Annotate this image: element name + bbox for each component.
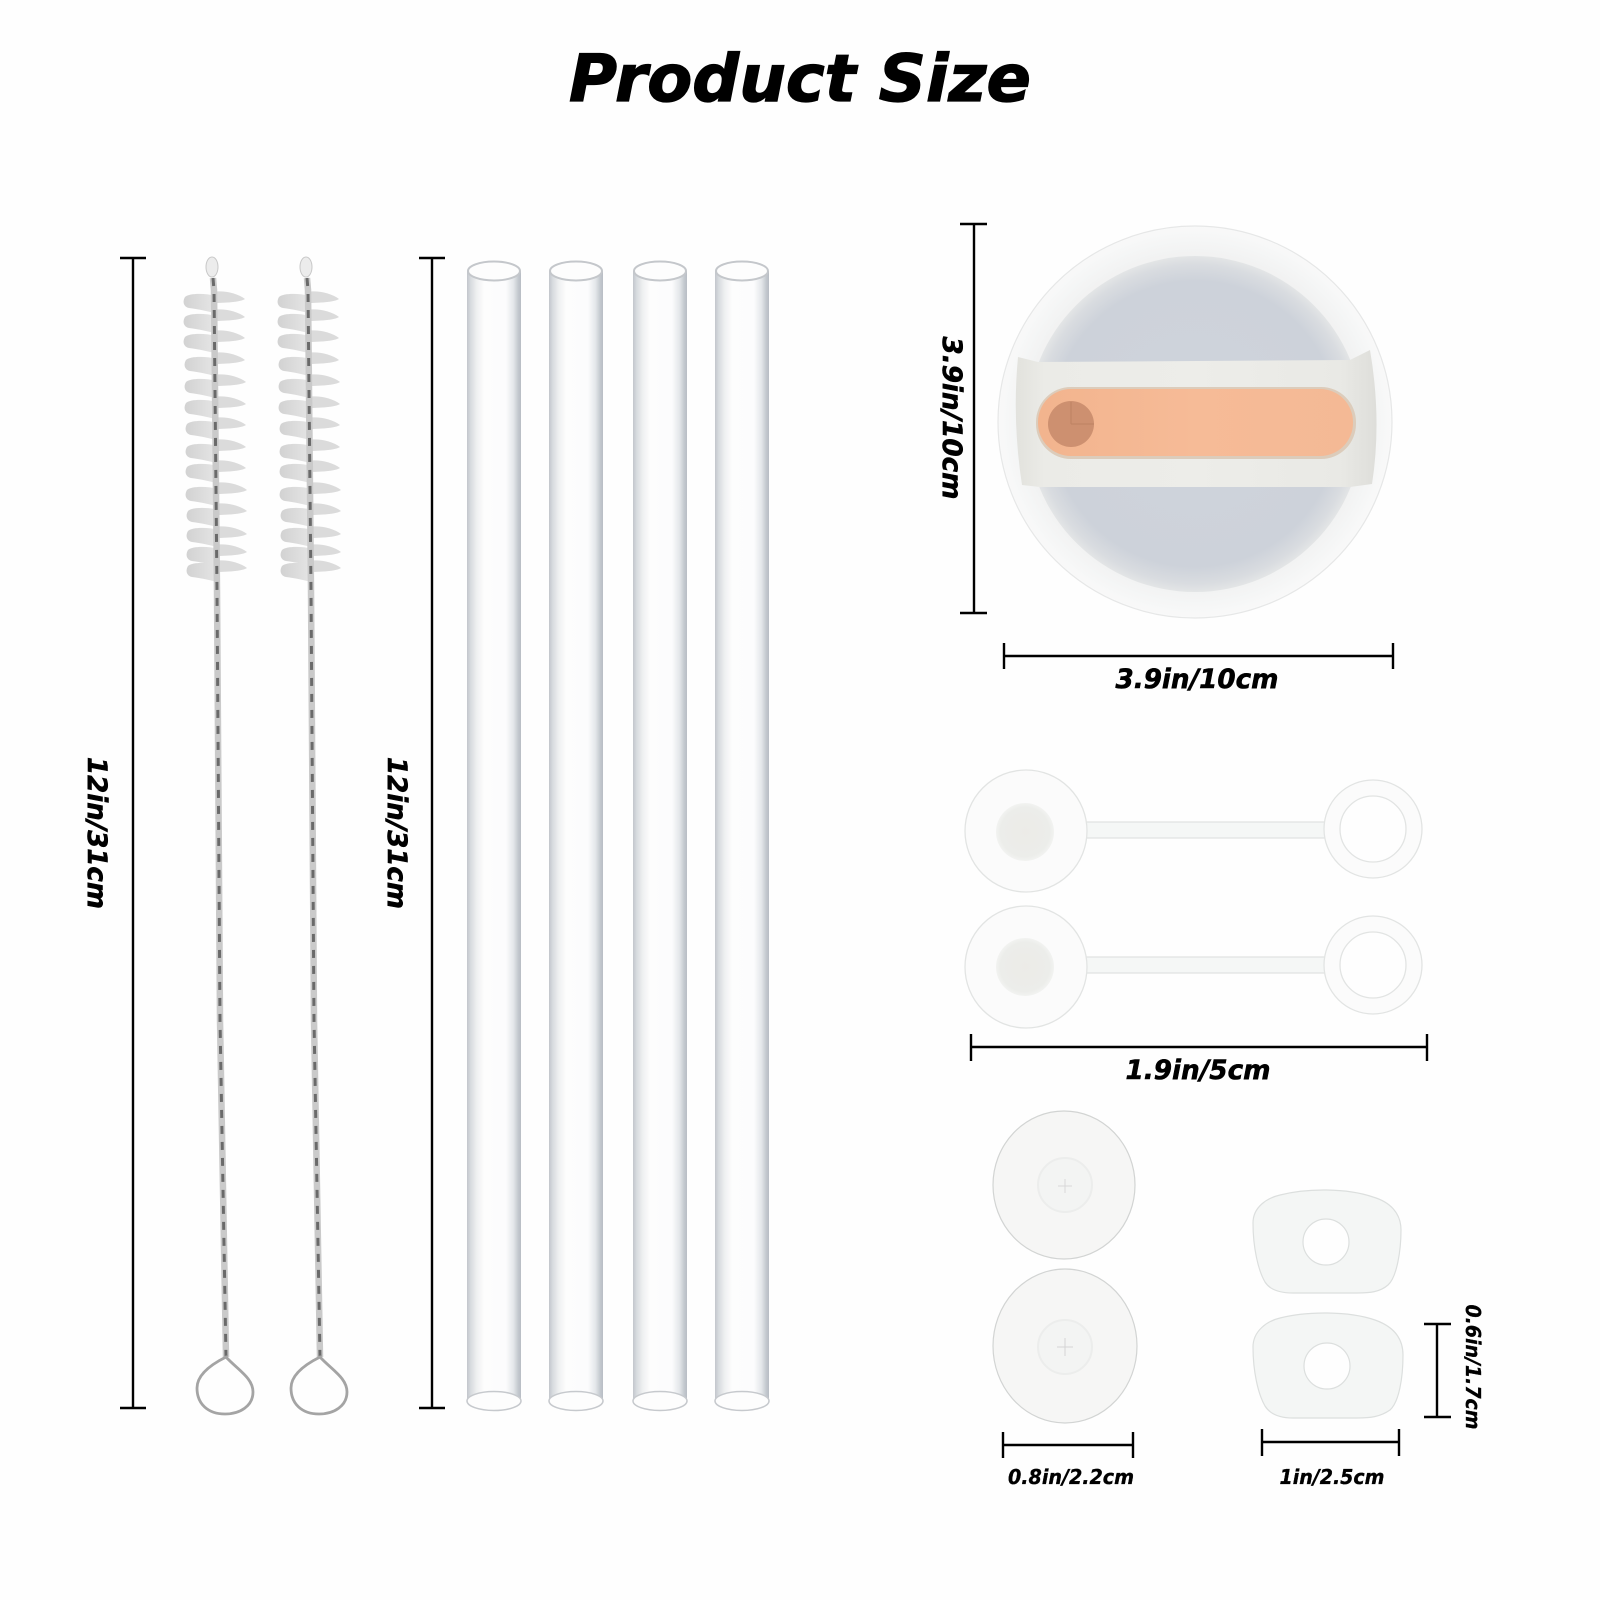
dimension line: lid width xyxy=(1004,643,1393,669)
label: lid height: 3.9in/10cm xyxy=(936,336,967,500)
label: seal width: 0.8in/2.2cm xyxy=(1008,1465,1134,1489)
icon: lid xyxy=(998,226,1392,618)
panel: rectangular gaskets xyxy=(1253,1190,1485,1489)
dimension line: seal width xyxy=(1003,1432,1133,1458)
icon: gasket 1 xyxy=(1253,1190,1401,1293)
label: gasket height: 0.6in/1.7cm xyxy=(1461,1304,1485,1430)
label: strap length: 1.9in/5cm xyxy=(1126,1055,1270,1086)
icon: straw 4 xyxy=(715,262,769,1410)
label: gasket width: 1in/2.5cm xyxy=(1280,1465,1384,1489)
icon: cleaning brush 2 xyxy=(278,257,347,1414)
dimension line: gasket width xyxy=(1262,1429,1399,1456)
label: brush length: 12in/31cm xyxy=(81,757,112,909)
icon: straw 1 xyxy=(467,262,521,1410)
icon: round seal 2 xyxy=(993,1269,1137,1423)
icon: gasket 2 xyxy=(1253,1313,1403,1418)
label: straw length: 12in/31cm xyxy=(381,757,412,909)
dimension line: lid height xyxy=(960,224,987,613)
icon: stopper strap 1 xyxy=(965,770,1422,892)
icon: stopper strap 2 xyxy=(965,906,1422,1028)
panel: straws with dimension xyxy=(381,258,769,1410)
panel: cleaning brushes with dimension xyxy=(81,257,347,1414)
dimension line: strap length xyxy=(971,1034,1427,1061)
icon: straw 2 xyxy=(549,262,603,1410)
panel: round seals xyxy=(993,1111,1137,1489)
panel: tumbler lid xyxy=(936,224,1393,695)
dimension line: brush length xyxy=(120,258,146,1408)
dimension line: straw length xyxy=(419,258,445,1408)
panel: stopper straps xyxy=(965,770,1427,1086)
icon: round seal 1 xyxy=(993,1111,1135,1259)
icon: cleaning brush 1 xyxy=(184,257,253,1414)
icon: straw 3 xyxy=(633,262,687,1410)
dimension line: gasket height xyxy=(1424,1324,1451,1417)
label: lid width: 3.9in/10cm xyxy=(1116,664,1278,695)
title: Product Size xyxy=(569,42,1031,117)
